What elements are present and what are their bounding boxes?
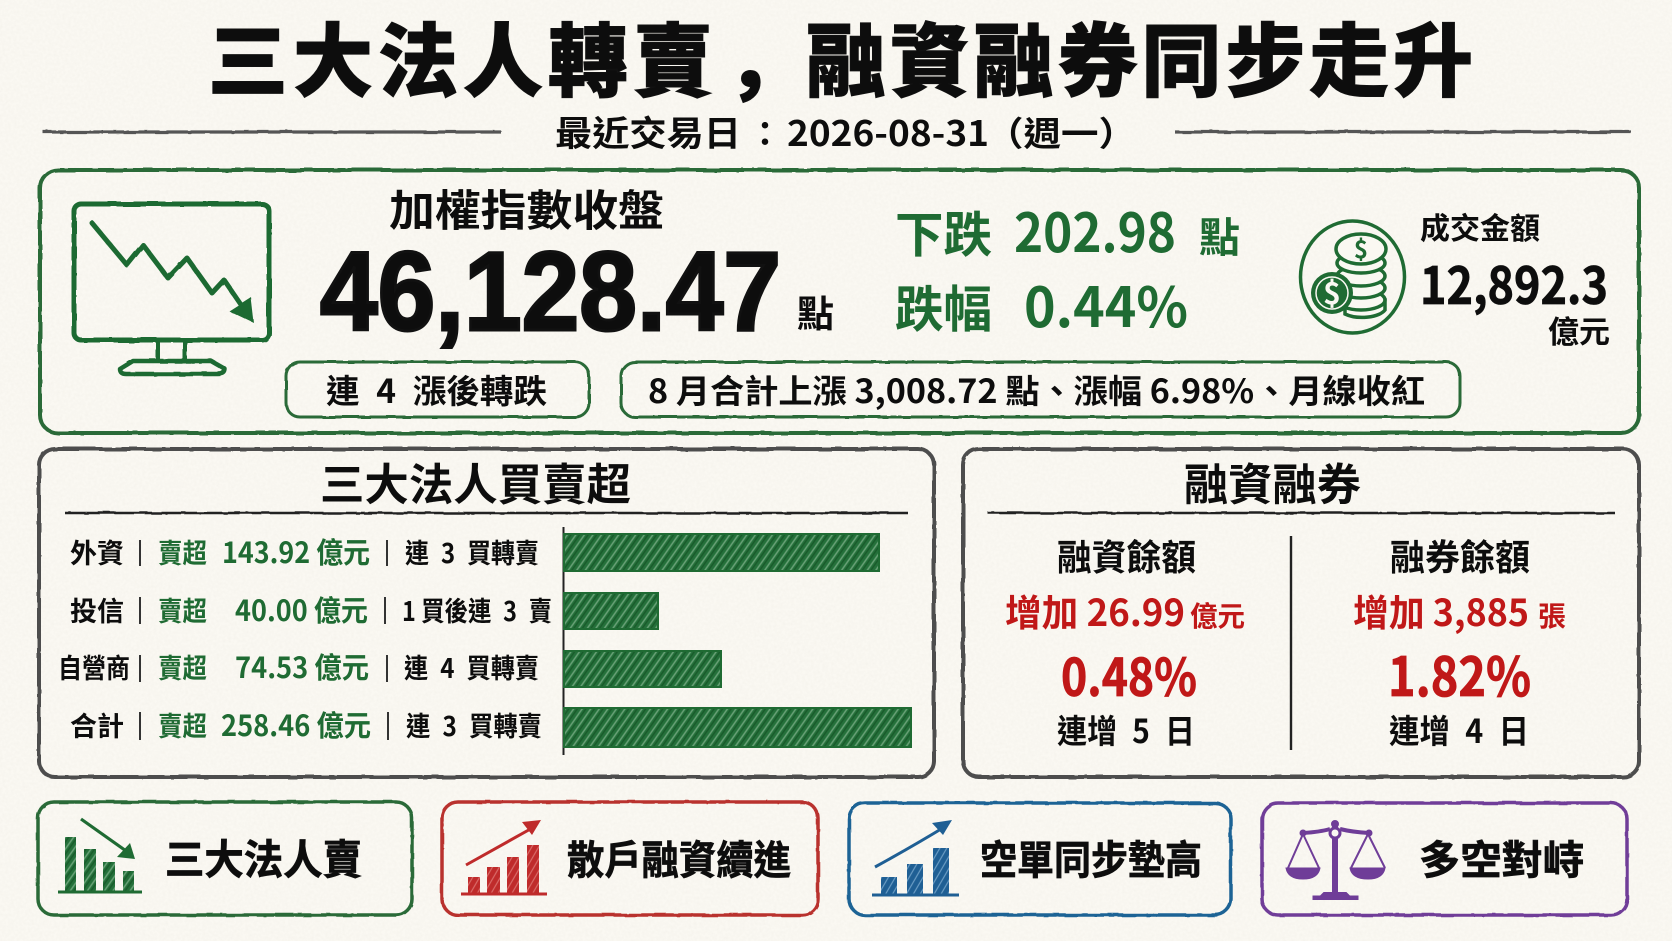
column: short balance: 張 [1538, 595, 1566, 635]
column: short balance: 連增 4 日 [1389, 705, 1529, 753]
bar chart [564, 527, 911, 755]
title: ， [726, 0, 806, 114]
callout: retail margin keeps rising: 散戶融資續進 [567, 828, 791, 886]
callout: bulls and bears face off [1262, 803, 1627, 915]
callout: bulls and bears face off: 多空對峙 [1419, 828, 1584, 886]
column: short balance: 融券餘額 [1390, 529, 1530, 581]
row: foreign investors [70, 530, 539, 572]
percent change: 跌幅 [895, 270, 992, 342]
column: margin balance: 增加 26.99 [1005, 583, 1185, 637]
row: total: 連 3 買轉賣 [406, 705, 542, 744]
panel: index close [40, 170, 1639, 433]
row: investment trust: 賣超 [158, 590, 207, 629]
row: investment trust: 投信 [70, 590, 124, 629]
icon: coins: $ [1323, 269, 1341, 313]
row: foreign investors: 連 3 買轉賣 [405, 532, 539, 571]
turnover unit: 億元 [1548, 307, 1610, 352]
row: investment trust: 40.00 億元 [235, 588, 368, 630]
column: margin balance [1005, 529, 1245, 753]
point change: 202.98 [1014, 189, 1176, 268]
badge: streak: 連 4 漲後轉跌 [326, 365, 547, 413]
percent change: 0.44% [1024, 263, 1188, 343]
icon: coins [1300, 221, 1404, 333]
title: 融資融券同步走升 [806, 0, 1473, 114]
percent change [895, 263, 1188, 343]
row: foreign investors: 賣超 [158, 532, 207, 571]
title: 三大法人轉賣 [208, 0, 713, 114]
row: total: 賣超 [158, 705, 207, 744]
icon: balance scale [1286, 820, 1385, 900]
subtitle: latest trading date [43, 106, 1631, 157]
column: short balance: 1.82% [1388, 633, 1531, 712]
row: total: 合計 [70, 705, 124, 744]
icon: monitor with falling chart [74, 204, 269, 374]
turnover label: 成交金額 [1420, 204, 1540, 248]
column: short balance: 增加 3,885 [1353, 583, 1529, 637]
subtitle: latest trading date: 最近交易日 [555, 106, 741, 157]
badge: streak [286, 362, 589, 417]
column: margin balance: 0.48% [1061, 636, 1197, 711]
panel heading: 三大法人買賣超 [320, 449, 631, 513]
row: dealers: 74.53 億元 [235, 645, 369, 687]
row: dealers: 自營商 [58, 647, 130, 686]
icon: rising bars red [461, 820, 547, 894]
column: margin balance: 連增 5 日 [1057, 705, 1195, 753]
callout: institutions sell: 三大法人賣 [165, 826, 362, 886]
title [208, 0, 1473, 114]
callout: retail margin keeps rising [442, 802, 818, 915]
badge: august summary: 8 月合計上漲 3,008.72 點、漲幅 6.98%、月線收紅 [648, 365, 1425, 413]
row: dealers [58, 645, 539, 687]
index value: 46,128.47 [320, 229, 781, 354]
column: margin balance: 融資餘額 [1057, 529, 1196, 581]
callout: shorts climb too [849, 803, 1231, 915]
panel: margin and short [963, 449, 1639, 777]
row: investment trust: 1 買後連 3 賣 [402, 590, 552, 629]
row: foreign investors: 143.92 億元 [222, 530, 370, 572]
callout: institutions sell [38, 802, 412, 915]
subtitle: latest trading date: 2026-08-31 [787, 106, 989, 157]
row: dealers: 賣超 [158, 647, 207, 686]
row: foreign investors: 外資 [70, 532, 124, 571]
icon: coins: $ [1354, 230, 1368, 265]
icon: falling bars [58, 819, 142, 892]
subtitle: latest trading date: ： [748, 107, 782, 156]
row: investment trust [70, 588, 552, 630]
row: dealers: 連 4 買轉賣 [404, 647, 539, 686]
column: short balance [1353, 529, 1566, 753]
row: total [70, 703, 542, 745]
point change: 下跌 [895, 196, 992, 267]
panel: institutional net buy/sell [39, 449, 934, 777]
icon: rising bars blue [872, 820, 959, 895]
point change [895, 189, 1240, 268]
point change: 點 [1199, 204, 1240, 264]
index unit: 點 [797, 284, 834, 338]
column: margin balance: 億元 [1190, 595, 1245, 635]
panel heading: 融資融券 [1184, 449, 1361, 513]
turnover value: 12,892.3 [1420, 245, 1608, 319]
subtitle: latest trading date: （週一） [986, 107, 1136, 156]
index label: 加權指數收盤 [389, 177, 664, 239]
callout: shorts climb too: 空單同步墊高 [980, 828, 1202, 886]
row: total: 258.46 億元 [221, 703, 371, 745]
